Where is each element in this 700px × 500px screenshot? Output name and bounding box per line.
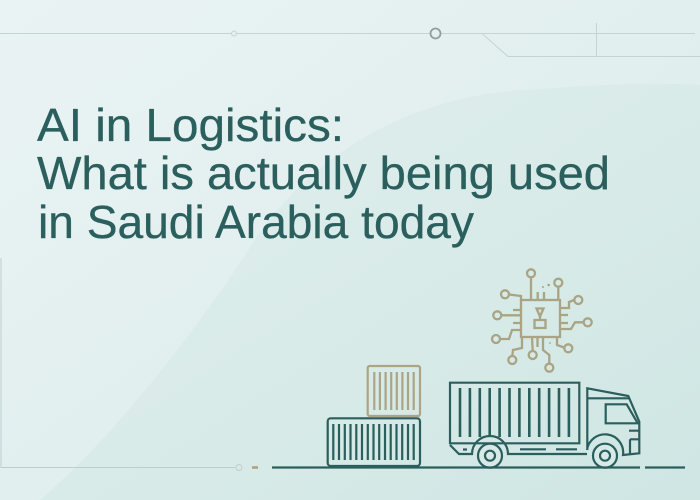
- chip body: [521, 300, 560, 337]
- chassis dashes: [463, 448, 577, 451]
- icon: tan stacked container: [368, 366, 420, 416]
- icon: lower container: [328, 418, 420, 466]
- circuit nodes: [527, 269, 535, 277]
- ground line: [272, 466, 685, 469]
- top ring node: [430, 28, 440, 38]
- top circuit decoration: [0, 23, 700, 56]
- cargo ribs: [460, 388, 569, 437]
- icon: AI circuit chip: [492, 269, 592, 372]
- rear wheel: [478, 444, 502, 468]
- cargo box: [450, 383, 579, 443]
- title: What is actually being used: [37, 147, 610, 199]
- package symbol: [534, 308, 546, 328]
- title: [37, 99, 610, 248]
- chassis: [450, 388, 639, 455]
- cab details: [587, 398, 639, 454]
- title: AI in Logistics:: [37, 99, 344, 151]
- front wheel: [593, 444, 617, 468]
- bottom circuit decoration: [1, 258, 258, 470]
- title: in Saudi Arabia today: [38, 196, 474, 248]
- icon: truck: [450, 383, 639, 468]
- circuit traces: [500, 277, 584, 364]
